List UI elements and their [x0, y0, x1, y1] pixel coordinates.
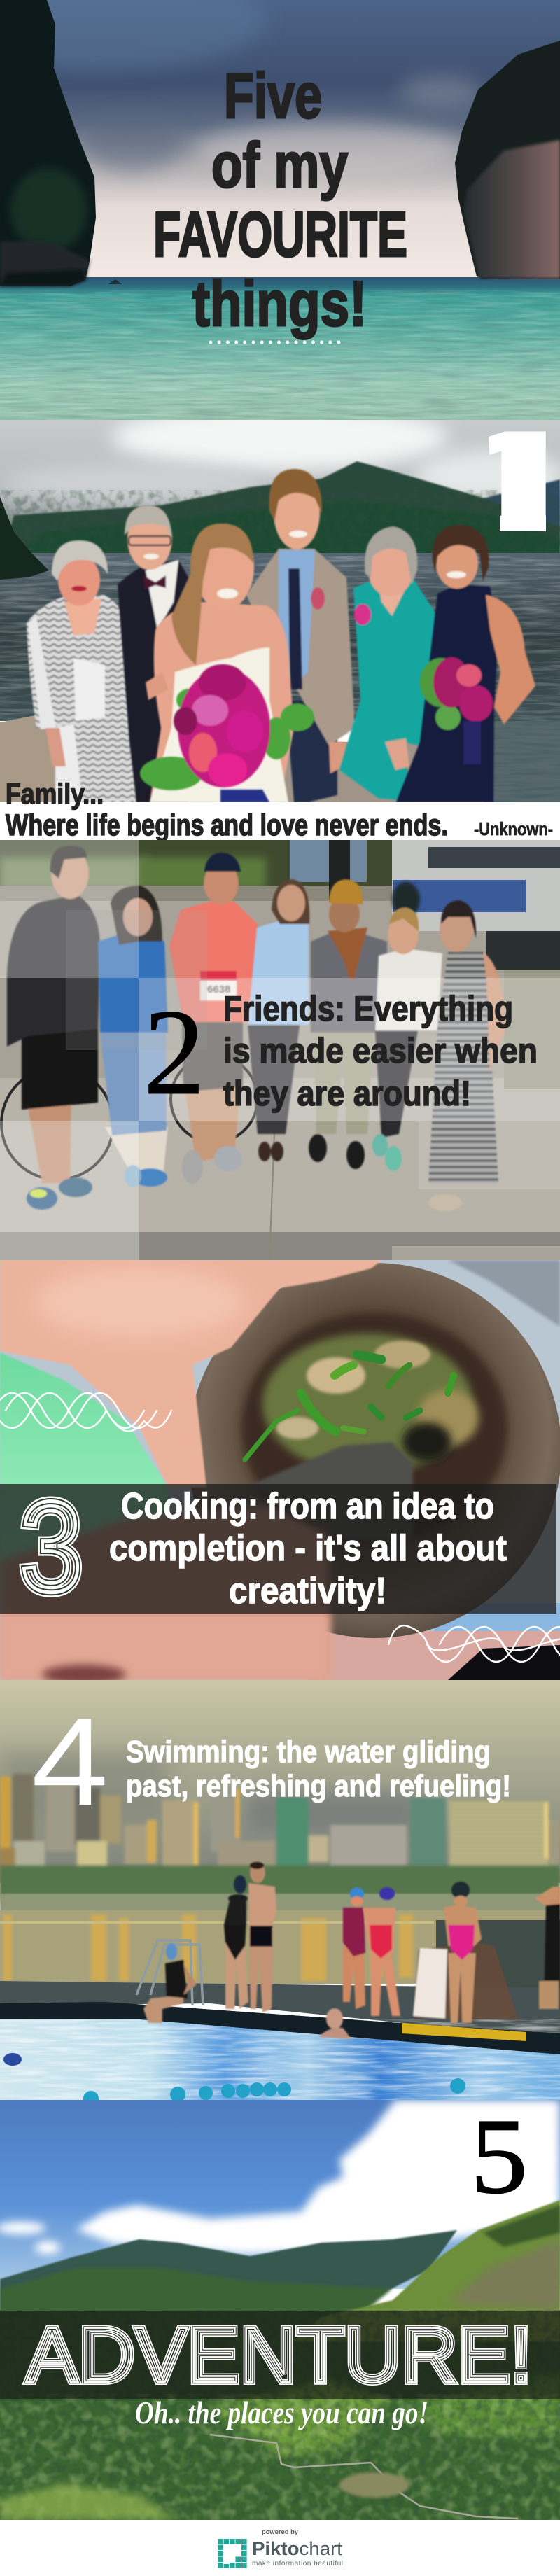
- bouquet: sister: [420, 657, 493, 764]
- photo: deck and pool edge: [0, 1981, 560, 2037]
- number: 3: 3: [20, 1474, 83, 1618]
- text: Piktochart wordmark: Piktochart: [252, 2538, 343, 2559]
- number: 3: 3: [20, 1474, 83, 1618]
- figure: mother: [340, 526, 440, 802]
- photo: hand holding mortar: [0, 1260, 382, 1488]
- footer: powered by Piktochart: [218, 2528, 343, 2568]
- ladder: [136, 1940, 203, 2005]
- text: family quote: Family...: [6, 778, 104, 810]
- skyline: [0, 1774, 560, 1904]
- text: swimming caption: Swimming: the water gliding: [126, 1735, 491, 1769]
- text: subtitle: Oh.. the places you can go!: [135, 2395, 428, 2430]
- text: cooking caption: completion - it's all about: [109, 1528, 507, 1569]
- panel: hero title: [0, 0, 560, 420]
- band: dark caption strip: [0, 1484, 556, 1614]
- number: 5: 5: [470, 2097, 528, 2216]
- photo: family at the lake: [0, 404, 560, 805]
- text: powered by: powered by: [262, 2528, 299, 2536]
- grass: [0, 2484, 178, 2520]
- panel: 1 family: [0, 402, 560, 842]
- figure: sister: [396, 525, 536, 802]
- ornament: right wave: [388, 1625, 560, 1662]
- figure: swimmer in red suit: [363, 1887, 400, 2016]
- rock in the bay: [108, 279, 122, 284]
- heading: title lines: things!: [192, 269, 367, 340]
- figure: swimmer in trunks: [248, 1862, 276, 2012]
- ornament: left wave: [0, 1393, 172, 1431]
- number: 4: 4: [31, 1692, 108, 1831]
- photo: green shirt: [0, 1352, 168, 1610]
- sign board and cart: [413, 1942, 518, 2019]
- figure: runner in coral shirt: [169, 853, 258, 1184]
- photo: mortar and pestle: [0, 1260, 560, 1684]
- photo: blurred hand on pestle: [0, 1505, 329, 1680]
- panel: 3 cooking: [0, 1260, 560, 1684]
- text: family quote: [6, 778, 553, 842]
- text: swimming caption: [126, 1735, 511, 1803]
- panel: 5 adventure: [0, 2097, 560, 2520]
- heading: title lines: FAVOURITE: [153, 200, 407, 270]
- heading: title lines: Five: [224, 61, 322, 132]
- figure: man in water: [318, 2008, 351, 2039]
- text: friends caption: [223, 989, 538, 1113]
- overlays: translucent tiles: [0, 840, 560, 1260]
- text: cooking caption: Cooking: from an idea to: [121, 1486, 494, 1527]
- text: cooking caption: creativity!: [229, 1571, 386, 1611]
- text: friends caption: is made easier when: [223, 1031, 538, 1070]
- photo: friends after a race: [0, 840, 560, 1260]
- figure: man in black: [7, 846, 100, 1210]
- figure: woman in pale top: [248, 879, 309, 1161]
- logo: Piktochart mark: [218, 2539, 247, 2568]
- number: 2: 2: [144, 984, 205, 1121]
- text: cooking caption: [109, 1486, 507, 1611]
- figure: man in beanie: [309, 879, 387, 1169]
- photo: mountain valley: [0, 2100, 560, 2520]
- figure: swimmer in black suit: [224, 1875, 248, 2009]
- figure: swimmer seated: [144, 1943, 197, 2023]
- figure: woman in striped dress: [428, 900, 505, 1211]
- text: friends caption: Friends: Everything: [223, 989, 513, 1028]
- number: 3: 3: [20, 1474, 83, 1618]
- photo: tropical bay with cliffs: [0, 0, 560, 420]
- figure: father: [118, 505, 190, 802]
- figure: bride: [146, 524, 294, 802]
- clouds: [0, 2100, 560, 2254]
- figure: woman in white: [372, 907, 442, 1171]
- figure: runner in coral shirt: 6638: [207, 983, 230, 995]
- text: family quote: Where life begins and love never ends.: [6, 808, 448, 842]
- text: friends caption: they are around!: [223, 1074, 471, 1113]
- heading: adventure: ADVENTURE!: [26, 2311, 532, 2399]
- band: dark title strip: [0, 2311, 560, 2399]
- reflections: golden streaks: [4, 1914, 413, 1981]
- figure: groom: [246, 469, 355, 802]
- buoys: [83, 2078, 465, 2106]
- text: swimming caption: past, refreshing and refueling!: [126, 1769, 511, 1803]
- figure: swimmer in dark pink suit: [343, 1887, 365, 2009]
- background: bicycle wheels: [1, 1056, 258, 1180]
- panel: 4 swimming: [0, 1680, 560, 2106]
- bouquet: bride: [140, 664, 314, 802]
- heading: title lines: of my: [211, 130, 348, 201]
- text: tagline: make information beautiful: [252, 2560, 343, 2568]
- figure: swimmer in magenta suit: [444, 1882, 482, 2023]
- number: 1: 1: [435, 402, 560, 562]
- divider: dotted line: [211, 340, 347, 344]
- food: green chillies: [245, 1334, 479, 1474]
- heading: adventure: ADVENTURE!: [26, 2311, 532, 2399]
- figure: coach on the right: [535, 1886, 560, 2009]
- heading: title lines: [153, 61, 407, 340]
- panel: 2 friends: [0, 840, 560, 1260]
- figure: grandmother: [27, 540, 136, 802]
- heading: adventure: ADVENTURE!: [26, 2311, 532, 2399]
- photo: swimmers at an outdoor pool: [0, 1680, 560, 2106]
- figure: woman in blue jacket: [98, 886, 168, 1187]
